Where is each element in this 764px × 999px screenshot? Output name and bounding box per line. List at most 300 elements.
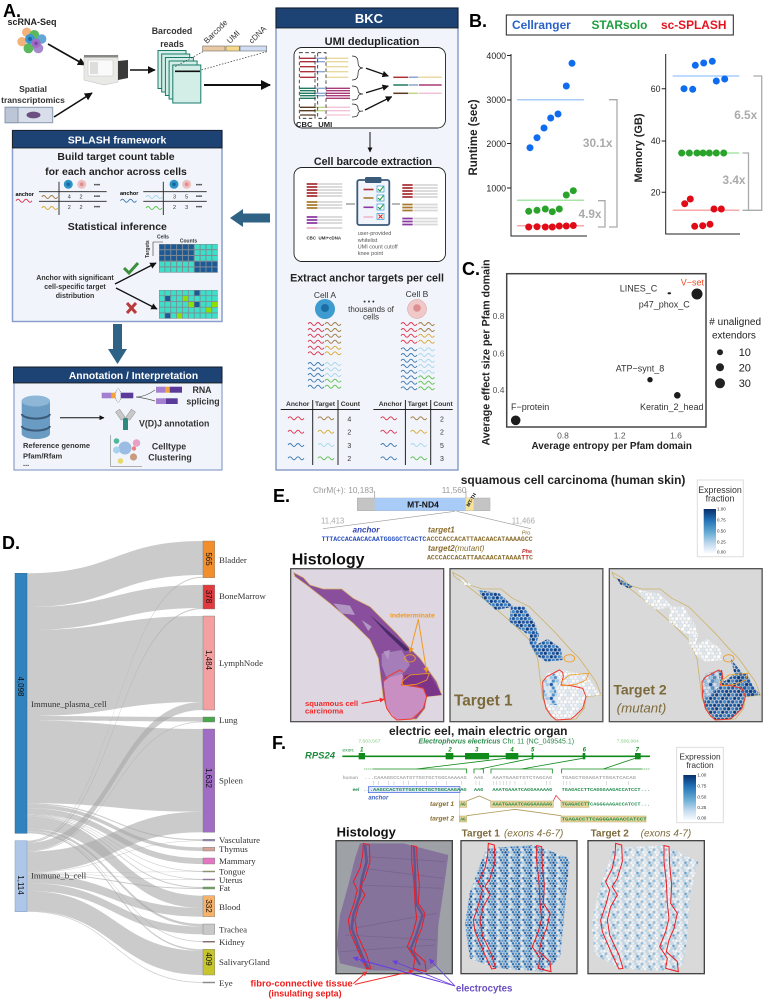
read structure labels: cDNA (247, 24, 269, 45)
heading: target 2 exons: Target 2 (591, 829, 629, 840)
label: celltype clustering: Clustering (148, 452, 192, 462)
gene model RPS24: 5 (531, 748, 535, 754)
legend: tools (506, 15, 733, 35)
count table left: ••• (94, 205, 100, 211)
thousands of cells note: thousands of (348, 305, 395, 314)
node: Immune_b_cell (15, 841, 27, 912)
box: cell barcode extraction diagram: UMI count cutoff (358, 244, 398, 250)
annotation: fibro-connective tissue: (insulating septa) (268, 989, 342, 999)
annotation: indeterminate: indeterminate (390, 612, 435, 619)
annotation: indeterminate (390, 612, 435, 672)
legend: tools: Cellranger (512, 18, 571, 32)
gene model RPS24 (305, 748, 650, 773)
scatter point labels: p47_phox_C (639, 300, 690, 310)
heading: histology F: Histology (337, 825, 397, 840)
label: anchor with significant distribution: cell-specific target (44, 284, 106, 291)
colour legend F: 0.50 (697, 794, 707, 799)
heading: histology E: Histology (292, 552, 365, 568)
memory brackets (742, 76, 762, 210)
scatter size legend: 30 (739, 378, 751, 390)
icon: database (22, 396, 50, 439)
arrow: SPLASH to annotation (108, 324, 127, 364)
label: reference databases: ... (23, 459, 29, 468)
anchor and target sequences (321, 516, 535, 561)
gene model: MT-ND4 (313, 485, 531, 529)
heading: cell barcode extraction: Cell barcode extraction (314, 156, 432, 168)
scatter size legend: 20 (739, 362, 751, 374)
annotation: squamous cell carcinoma: carcinoma (305, 706, 344, 715)
gene model RPS24: 1 (360, 748, 363, 754)
box: UMI deduplication diagram: UMI (318, 120, 332, 129)
count table right: 3 (185, 205, 188, 211)
runtime tick labels: 2000 (486, 139, 506, 149)
icon: RNA splicing (102, 387, 182, 404)
header: annotation (14, 367, 222, 383)
panel: target 1 spatial map E (450, 569, 603, 722)
target 1 splice row: TGAGACCTTCAGGGAAGACCATCCT... (562, 802, 650, 808)
runtime axis title: Runtime (sec) (468, 99, 480, 176)
box: cell barcode extraction diagram: whitelist (357, 238, 378, 244)
panel: histology electric organ (336, 841, 452, 974)
human and eel sequence alignment: AAATGAAATCAGGAAAAAG (492, 787, 553, 793)
arrow: reads to BKC (204, 84, 270, 86)
memory axis title: Memory (GB) (633, 113, 645, 183)
panel label E: E. (273, 486, 290, 506)
cell B with reads (401, 289, 434, 390)
target 2 splice row: AG (460, 816, 466, 822)
box: UMI deduplication diagram: CBC (296, 120, 313, 129)
scatter point labels: LINES_C (620, 284, 658, 294)
gene coordinates: 7,503,567 (358, 738, 381, 744)
target 2 splice row: target 2 (430, 816, 454, 823)
human and eel sequence alignment: AAG (474, 775, 484, 781)
label: Target 2 (mutant): Target 2 (613, 681, 667, 697)
box: cell barcode extraction diagram: CBC (306, 236, 317, 240)
label: spatial transcriptomics: transcriptomics (1, 95, 65, 105)
gene coordinates (358, 738, 639, 746)
panel label F: F. (272, 733, 286, 753)
scatter x ticks: 1.2 (614, 430, 626, 440)
heading: extract anchor targets per cell: Extract anchor targets per cell (290, 272, 444, 284)
tissue nodes (203, 541, 215, 983)
icon: antibody (115, 409, 136, 430)
chart: memory (633, 54, 762, 234)
read structure bar (203, 46, 267, 51)
label: scRNA-Seq: scRNA-Seq (7, 17, 57, 27)
box: cell barcode extraction diagram: user-provided (358, 231, 391, 237)
anchor and target sequences: Pro (522, 530, 530, 536)
anchor and target sequences: target1 (428, 525, 455, 534)
table: cell B counts: Target (408, 401, 428, 408)
gene coordinates: Electrophorus electricus Chr. 11 (NC_049545.1) (419, 739, 574, 746)
panel: histology squamous cell carcinoma (291, 569, 444, 722)
header: SPLASH framework: SPLASH framework (68, 134, 166, 146)
arrow: instrument to reads (130, 69, 155, 71)
scatter y ticks: 0.4 (493, 385, 505, 395)
colour legend E: fraction (706, 494, 735, 504)
annotation: electrocytes: electrocytes (456, 984, 512, 995)
table: cell B counts (373, 400, 453, 465)
tissue labels: Trachea (219, 924, 247, 934)
anchor and target sequences: target2 (428, 544, 455, 553)
node: Immune_b_cell: 1,114 (16, 875, 25, 895)
gene model: MT-ND4: MT-TH (466, 492, 478, 508)
table: cell B counts: Anchor (379, 401, 403, 408)
label: RNA splicing: splicing (186, 396, 220, 406)
runtime brackets (598, 100, 617, 227)
memory Cellranger dots (680, 58, 728, 93)
stacked read cards (158, 50, 201, 103)
runtime Cellranger dots (526, 60, 576, 151)
panel label D: D. (2, 533, 20, 553)
runtime tick labels: 4000 (486, 51, 506, 61)
chart: effect size vs entropy scatter (480, 259, 761, 452)
icon: check mark (124, 263, 138, 273)
runtime fold labels: 30.1x (583, 136, 613, 150)
count table right: 2 (173, 205, 176, 211)
panel: target 2 spatial map E (609, 569, 762, 722)
tissue labels: Lung (219, 715, 238, 725)
table: cell B counts: 2 (440, 416, 444, 424)
label: RNA splicing: RNA (192, 385, 212, 395)
human and eel sequence alignment: AAATGAAGTGTCTAGCAG (492, 775, 553, 781)
tissue node values: 332 (204, 899, 213, 913)
human and eel sequence alignment: human (343, 775, 358, 780)
panel: annotation / interpretation (14, 367, 222, 470)
count table left: ••• (94, 194, 100, 200)
arrow: to non-significant matrix (116, 288, 157, 309)
annotation: squamous cell carcinoma: squamous cell (305, 699, 358, 708)
human and eel sequence alignment: TGAGCTGGAGATTGGATCACAG (562, 775, 636, 781)
target 1 splice row (430, 793, 650, 822)
human and eel sequence alignment: ...AAGCCACTGTTGGTGCTGCTGGCAAGAAG (363, 787, 467, 793)
box: UMI deduplication diagram (294, 48, 446, 129)
heading: target 1 exons: Target 1 (462, 829, 500, 840)
target 1 splice row: AG (460, 802, 466, 808)
scatter point labels: ATP−synt_8 (616, 364, 664, 374)
arrow: scRNA to instrument (48, 44, 85, 65)
table: cell A counts: 2 (347, 456, 351, 463)
table: cell B counts: 5 (440, 443, 444, 450)
thousands of cells note: cells (363, 312, 379, 322)
label: anchor with significant distribution: distribution (56, 293, 94, 300)
sankey ribbons (27, 541, 203, 983)
table: cell A counts: 3 (347, 443, 351, 450)
panel label B: B. (469, 11, 487, 31)
count table right: ••• (196, 183, 202, 189)
table: cell A counts: Target (315, 401, 336, 408)
target 1 splice row: target 1 (430, 801, 454, 808)
anchor and target sequences: (mutant) (455, 544, 485, 553)
memory fold labels: 6.5x (734, 108, 758, 122)
label: reference databases: Reference genome (23, 441, 90, 450)
table: cell A counts: 2 (347, 430, 351, 436)
header: SPLASH framework (12, 130, 222, 148)
colour legend E: 0.75 (717, 518, 726, 522)
tissue labels: Thymus (219, 844, 248, 854)
label: Target 1: Target 1 (454, 693, 513, 710)
label: barcoded reads: Barcoded (152, 26, 192, 36)
gene model RPS24: exon: (342, 748, 355, 754)
title: electric eel: electric eel, main electric organ (389, 724, 568, 738)
human and eel sequence alignment: ...CAAAGGCCAATGTTGGTGCTGGCAAAAAG (364, 775, 467, 781)
label: barcoded reads: reads (160, 39, 184, 49)
panel: target 1 map F (461, 841, 577, 974)
tissue node values: 378 (204, 590, 213, 604)
table: cell A counts: Anchor (286, 401, 310, 408)
memory sc-SPLASH dots (681, 196, 725, 230)
tissue labels: Fat (219, 883, 231, 893)
colour legend F (677, 747, 723, 823)
tissue labels: Kidney (219, 937, 245, 947)
table: cell A counts: Count (341, 401, 361, 408)
gene model RPS24: 7 (636, 748, 640, 754)
scatter y ticks: 0.6 (493, 348, 505, 358)
cell B with reads: Cell B (406, 289, 429, 299)
dashed zoom lines (175, 52, 267, 70)
runtime fold labels: 4.9x (579, 207, 602, 221)
annotation: fibro-connective tissue (251, 971, 413, 999)
runtime tick labels: 1000 (486, 184, 506, 194)
count table left: 4 (68, 194, 71, 200)
legend: tools: sc-SPLASH (661, 18, 726, 32)
human and eel sequence alignment: AAG (474, 787, 484, 793)
annotation: fibro-connective tissue: fibro-connective tissue (251, 978, 353, 988)
label: reference databases: Pfam/Rfam (23, 452, 63, 460)
count table left (16, 180, 107, 215)
count table left: 2 (79, 194, 83, 200)
target 2 splice row (430, 809, 647, 823)
scatter point labels (511, 278, 704, 412)
read structure labels: UMI (225, 29, 242, 45)
icon: cell cluster (17, 28, 46, 53)
colour legend F: fraction (686, 760, 714, 770)
heading: build target count table: Build target count table (57, 151, 175, 163)
colour legend E: 0.00 (717, 550, 726, 554)
table: cell A counts: 4 (347, 416, 351, 424)
scatter y ticks: 0.8 (493, 311, 505, 321)
panel: BKC (276, 8, 458, 470)
annotation: electrocytes (353, 958, 512, 995)
icon: cross (127, 303, 136, 313)
table: cell B counts: Count (433, 401, 453, 408)
workflow: sequencing inputs (1, 17, 155, 123)
heading: UMI deduplication: UMI deduplication (325, 36, 420, 48)
count table right: 3 (173, 194, 176, 200)
anchor and target sequences: Phe (522, 549, 532, 555)
count table right: ••• (196, 205, 202, 211)
gene alignment panel F (305, 724, 723, 823)
table: cell A counts (281, 400, 361, 465)
anchor and target sequences: 11,413 (321, 516, 344, 526)
colour legend E: 1.00 (717, 506, 726, 512)
colour legend E: Expression (698, 485, 742, 495)
read structure labels: Barcode (202, 18, 230, 45)
panel: target 2 map F (588, 841, 704, 974)
read structure labels (202, 18, 269, 45)
tissue labels: BoneMarrow (219, 591, 267, 601)
panel: SPLASH framework (12, 130, 222, 322)
label: Immune_plasma_cell: Immune_plasma_cell (31, 699, 107, 709)
label: anchor with significant distribution: Anchor with significant (36, 275, 114, 282)
tissue labels: Mammary (219, 856, 256, 866)
count table left: 2 (68, 205, 71, 211)
icon: sequencing instrument (84, 55, 128, 85)
box: cell barcode extraction diagram (294, 168, 446, 262)
scatter x ticks: 0.8 (557, 430, 569, 440)
tissue node values: 409 (204, 952, 213, 966)
anchor and target sequences: 11,466 (512, 516, 535, 526)
matrix axis labels: Counts (180, 238, 197, 244)
anchor and target sequences: anchor (353, 525, 380, 534)
header: BKC: BKC (355, 11, 384, 26)
table: cell B counts: 3 (440, 456, 444, 463)
heading: statistical inference: Statistical inference (68, 221, 167, 233)
runtime sc-SPLASH dots (525, 222, 577, 230)
matrix axis labels: Cells (157, 234, 169, 240)
colour legend F: 1.00 (697, 772, 707, 777)
colour legend F: Expression (679, 751, 721, 761)
scatter x title: Average entropy per Pfam domain (531, 441, 692, 452)
anchor and target sequences: TTTACCACAACACAATGGGGCTCACTC (322, 536, 427, 543)
header: BKC (276, 8, 458, 28)
scatter x ticks: 1.6 (670, 430, 682, 440)
count table left: ••• (94, 183, 100, 189)
colour legend F: 0.25 (697, 805, 707, 810)
memory tick labels: 40 (651, 136, 661, 146)
target 1 splice row: AAATGAAATCAGGAAAAAG (492, 802, 553, 808)
panel label C: C. (462, 259, 480, 279)
barcoded reads (152, 18, 270, 103)
matrix: not significant (159, 290, 218, 319)
anchor and target sequences: ACCCACCACATTAACAACATAAAAGCC (427, 536, 533, 543)
colour legend E (697, 480, 743, 557)
panel label A: A. (3, 1, 21, 21)
tissue node values: 1,484 (204, 650, 213, 671)
gene model RPS24: 2 (447, 748, 452, 754)
count table left: 2 (79, 205, 83, 211)
box: cell barcode extraction diagram: knee point (358, 251, 384, 257)
tissue labels: Bladder (219, 555, 247, 565)
header: annotation: Annotation / Interpretation (69, 371, 198, 382)
cell A with reads: Cell A (314, 290, 336, 300)
memory STARsolo dots (678, 150, 727, 156)
heading: build target count table: for each anchor across cells (45, 166, 187, 178)
memory tick labels: 20 (651, 188, 661, 198)
tissue node values (204, 552, 213, 966)
tissue node values: 565 (204, 552, 213, 566)
arrow: dedup to barcode extraction (369, 132, 371, 152)
arrow: to significant matrix (115, 263, 156, 284)
colour legend F: 0.75 (697, 783, 707, 788)
runtime STARsolo dots (525, 187, 577, 215)
node: Immune_plasma_cell (15, 573, 27, 833)
count table right: anchor (120, 191, 139, 197)
count table right (120, 180, 207, 215)
cell A with reads (308, 290, 341, 388)
tissue labels: Vasculature (219, 835, 260, 845)
label: Target 2 (mutant): (mutant) (617, 700, 666, 715)
gene model: MT-ND4: MT-ND4 (407, 500, 439, 510)
memory tick labels: 60 (651, 84, 661, 94)
heading: target 2 exons: (exons 4-7) (641, 829, 691, 840)
icon: tissue slide (5, 107, 53, 123)
scatter y title: Average effect size per Pfam domain (480, 259, 492, 446)
title: squamous cell carcinoma: squamous cell carcinoma (human skin) (461, 473, 685, 487)
chart: runtime (468, 51, 617, 236)
tissue labels: LymphNode (219, 658, 263, 668)
gene model RPS24: 4 (509, 748, 514, 754)
tissue labels: Uterus (219, 875, 243, 885)
heading: target 1 exons: (exons 4-6-7) (504, 829, 563, 840)
target 2 splice row: TGAGACCTTCAGGGAAGACCATCCT (562, 816, 647, 822)
tissue labels: Tongue (219, 866, 245, 876)
arrow: spatial to instrument (54, 93, 92, 117)
gene model: MT-ND4: 11,560 (442, 485, 467, 495)
label: spatial transcriptomics: Spatial (19, 84, 47, 94)
tissue labels: Eye (219, 978, 233, 988)
count table left: anchor (16, 192, 35, 198)
human and eel sequence alignment: eel (353, 787, 360, 792)
label: celltype clustering: Celltype (152, 442, 186, 452)
matrix axis labels: Targets (145, 240, 151, 258)
colour legend F: 0.00 (697, 816, 707, 821)
thousands of cells note: • • • (363, 299, 375, 306)
human and eel sequence alignment: TGAGACCTTCAGGGAAGACCATCCT... (562, 787, 650, 793)
tissue node values: 1,632 (204, 768, 213, 789)
matrix: significant (159, 244, 218, 273)
annotation: squamous cell carcinoma (305, 699, 384, 715)
scatter size legend: extendors (712, 330, 756, 342)
memory fold labels: 3.4x (723, 173, 746, 187)
icon: cell type clustering plot (110, 435, 142, 466)
tissue labels: Spleen (219, 776, 244, 786)
scatter size legend: # unaligned (709, 317, 761, 328)
matrix axis labels (145, 234, 197, 258)
gene model: MT-ND4: ChrM(+): 10,183 (313, 485, 374, 495)
gene model RPS24: 3 (475, 748, 479, 754)
label: Immune_b_cell: Immune_b_cell (31, 870, 87, 880)
arrow: database to annotations (60, 417, 104, 419)
count table right: 5 (185, 194, 188, 200)
runtime tick labels: 3000 (486, 95, 506, 105)
node: Immune_plasma_cell: 4,098 (16, 676, 25, 697)
human and eel sequence alignment: anchor (368, 796, 389, 802)
human and eel sequence alignment (343, 775, 650, 802)
panels: electric organ spatial maps (251, 825, 704, 999)
table: cell B counts: 2 (440, 430, 444, 436)
gene model RPS24: 6 (583, 748, 587, 754)
tissue labels: SalivaryGland (219, 957, 270, 967)
gene coordinates: 7,506,064 (617, 738, 639, 744)
box: cell barcode extraction diagram: UMI+cDNA (318, 236, 342, 240)
scatter points (511, 288, 702, 425)
colour legend E: 0.25 (717, 540, 726, 544)
scatter point labels: F−protein (511, 402, 549, 412)
scatter size legend: 10 (739, 347, 751, 359)
sankey diagram: cell types to tissues (15, 541, 270, 988)
legend: tools: STARsolo (592, 18, 647, 32)
label: VDJ annotation: V(D)J annotation (139, 418, 209, 428)
scatter point labels: Keratin_2_head (640, 402, 704, 412)
scatter point labels: V−set (681, 278, 704, 288)
tissue labels: Blood (219, 902, 241, 912)
arrow: BKC to SPLASH (230, 209, 270, 227)
gene model RPS24: RPS24 (305, 750, 336, 761)
count table right: ••• (196, 194, 202, 200)
anchor and target sequences: ACCCACCACATTAACAACATAAAA TTC (427, 554, 533, 561)
colour legend E: 0.50 (717, 528, 726, 534)
